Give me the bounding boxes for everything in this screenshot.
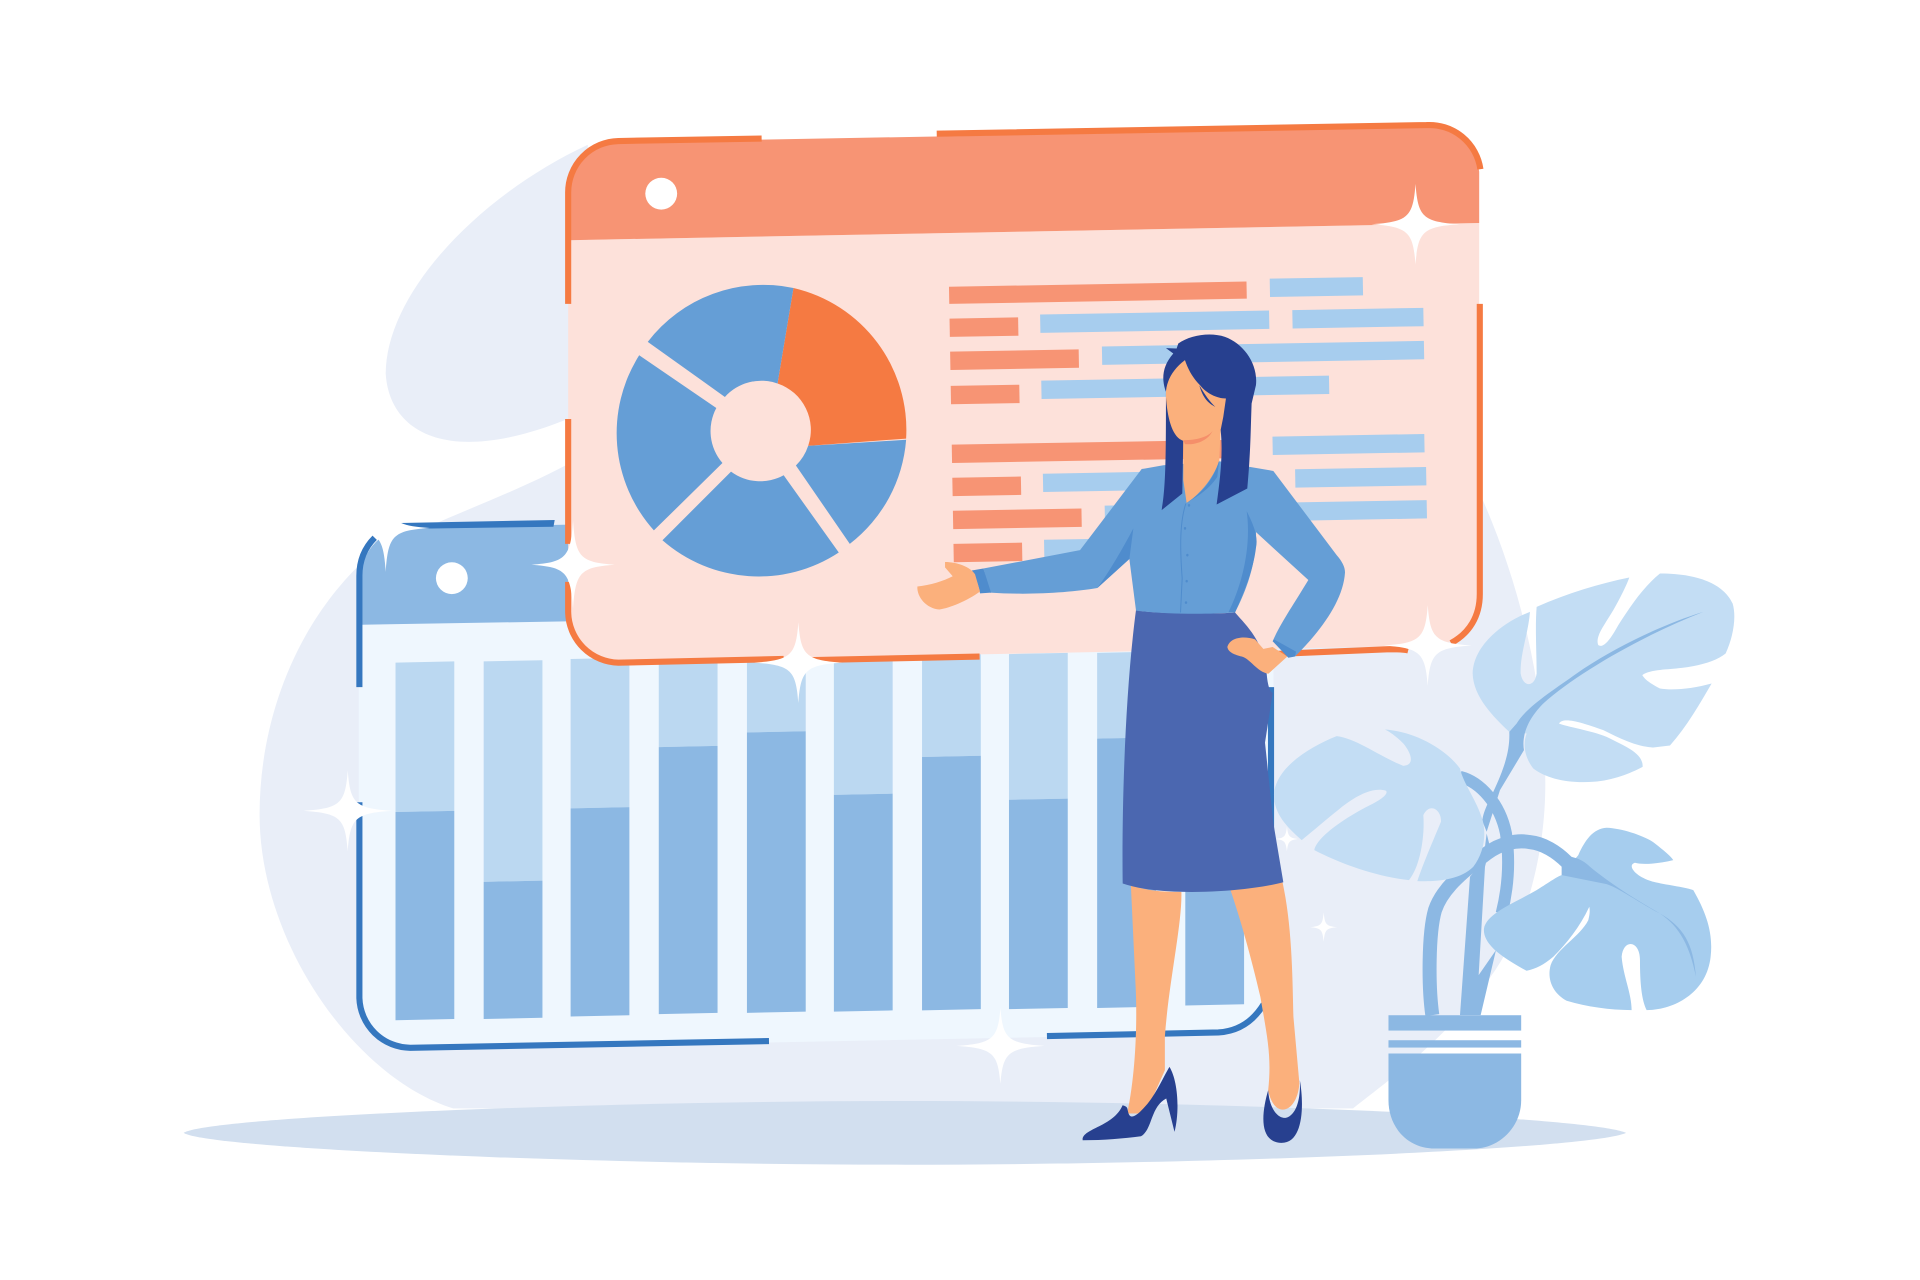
head — [1162, 334, 1256, 510]
window body — [568, 223, 1479, 661]
ground shadow — [184, 1101, 1626, 1165]
panel: bar chart window — [359, 520, 1273, 1050]
left shoe — [1083, 1067, 1178, 1140]
leaf: upper right — [1473, 573, 1734, 782]
hand on hip — [1227, 637, 1287, 674]
central stem — [1460, 833, 1496, 1015]
left cuff — [972, 569, 991, 593]
panel: pie chart and table window — [568, 125, 1480, 663]
leaf vein: lower right — [1562, 855, 1696, 977]
pointing hand — [917, 562, 980, 609]
left leg — [1127, 885, 1181, 1114]
bar chart — [396, 650, 1244, 1020]
legs and shoes — [1083, 882, 1302, 1143]
window border — [359, 538, 1271, 1048]
window top edge — [400, 520, 555, 529]
hair strand — [1199, 385, 1215, 407]
woman — [917, 334, 1345, 1143]
sparkles — [304, 184, 1472, 1084]
right shoe — [1263, 1080, 1302, 1143]
window header — [568, 128, 1479, 240]
collar — [1187, 460, 1219, 503]
upper body — [917, 461, 1345, 892]
pie chart — [617, 285, 906, 576]
background blobs — [260, 145, 1545, 1108]
right cuff — [1273, 639, 1296, 658]
data table rows — [949, 276, 1428, 562]
foliage and stems — [1274, 573, 1734, 1015]
arched stems — [1430, 777, 1567, 1015]
window header — [361, 524, 588, 625]
leaf: middle — [1274, 729, 1484, 881]
window border — [568, 125, 1480, 663]
plant — [1274, 573, 1734, 1149]
window button — [436, 562, 468, 594]
hair — [1162, 334, 1256, 510]
right leg — [1231, 882, 1299, 1110]
leaf: lower right — [1484, 828, 1711, 1010]
shirt placket and buttons — [1180, 503, 1190, 613]
face and neck — [1166, 360, 1226, 503]
flower pot — [1388, 1015, 1521, 1149]
chin shadow — [1183, 431, 1213, 444]
shirt shading — [1097, 511, 1257, 613]
window button — [645, 178, 677, 210]
leaf vein and stem: upper right — [1483, 612, 1703, 832]
shirt — [983, 461, 1345, 657]
skirt — [1123, 610, 1283, 892]
window body — [359, 606, 1273, 1050]
